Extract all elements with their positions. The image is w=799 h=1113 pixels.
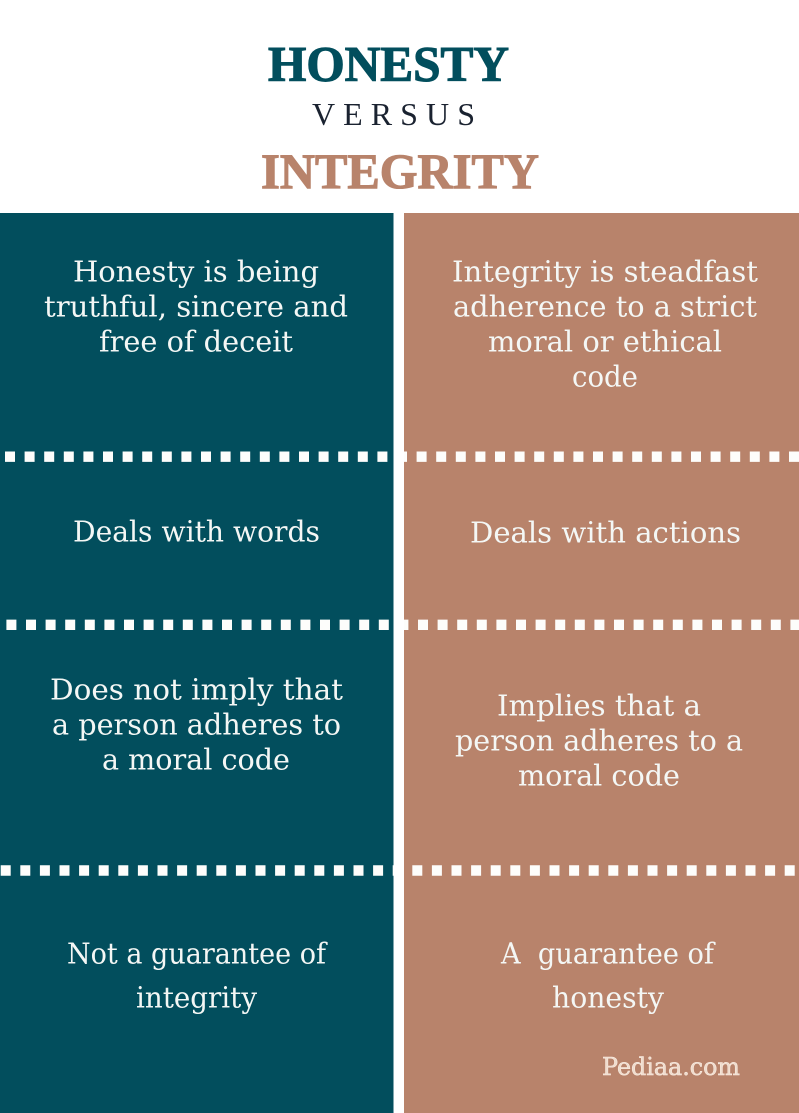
logo: Pediaa.com: Pediaa.com [602, 1053, 740, 1081]
title: honesty: HONESTY [268, 36, 509, 92]
text: integrity moral code: moral code [518, 760, 680, 792]
text: integrity definition [452, 256, 759, 394]
text: integrity definition: adherence to a strict [453, 290, 758, 324]
text: integrity guarantee: A guarantee of [500, 938, 716, 970]
text: integrity moral code [455, 690, 743, 792]
text: integrity deals with actions: Deals with actions [470, 516, 741, 550]
text: honesty moral code [50, 674, 344, 776]
title: versus: VERSUS [312, 96, 475, 132]
text: integrity guarantee [500, 938, 716, 1014]
text: honesty definition [44, 256, 348, 358]
text: honesty definition: free of deceit [99, 326, 294, 358]
text: honesty definition: truthful, sincere and [44, 290, 348, 324]
text: integrity definition: moral or ethical [488, 326, 722, 358]
text: honesty moral code: Does not imply that [50, 674, 344, 706]
text: honesty guarantee: integrity [136, 982, 258, 1014]
text: integrity definition: Integrity is steadfast [452, 256, 759, 288]
title: integrity: INTEGRITY [261, 143, 539, 199]
text: integrity guarantee: honesty [552, 982, 665, 1014]
text: integrity moral code: person adheres to a [455, 724, 743, 758]
panel: honesty [0, 213, 394, 1113]
text: integrity definition: code [572, 360, 638, 394]
text: integrity moral code: Implies that a [497, 690, 701, 722]
text: honesty definition: Honesty is being [73, 256, 319, 288]
text: honesty deals with words: Deals with words [73, 516, 320, 548]
text: honesty guarantee [67, 938, 328, 1014]
panel: integrity [404, 213, 799, 1113]
text: honesty moral code: a person adheres to [52, 708, 341, 742]
text: honesty guarantee: Not a guarantee of [67, 938, 328, 970]
text: honesty moral code: a moral code [102, 744, 290, 776]
